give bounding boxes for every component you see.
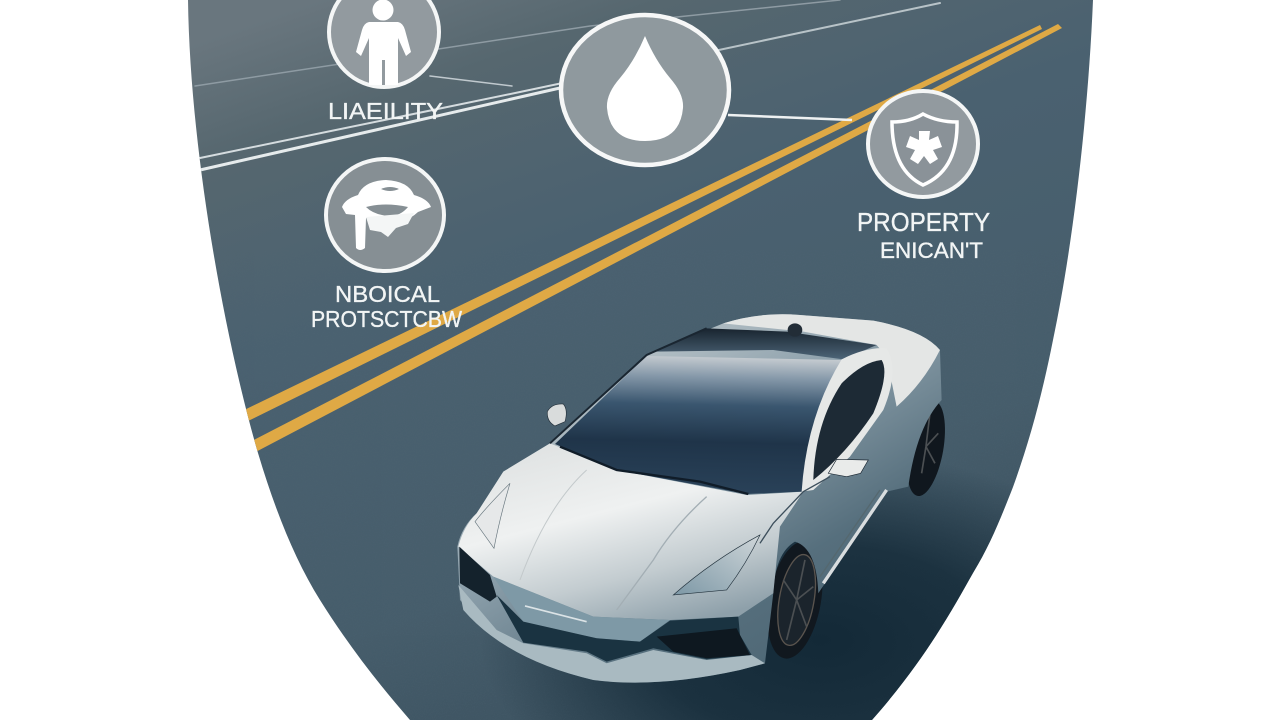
left headlight outline [475, 483, 510, 548]
rear glass [653, 328, 877, 359]
icon: liability person [329, 0, 439, 87]
side mirror right [828, 459, 868, 477]
rear deck highlight [723, 314, 940, 407]
white pillar [802, 348, 893, 492]
rear wheel [900, 398, 951, 499]
infographic: car insurance shield [188, 0, 1093, 720]
car illustration [457, 314, 951, 683]
label: property: PROPERTY [857, 207, 990, 237]
icon: medical protection [326, 159, 444, 271]
left grille [459, 547, 497, 602]
label: property: ENICAN'T [880, 238, 983, 263]
front light bar [525, 606, 587, 622]
icon: property shield [868, 91, 978, 197]
right headlight [673, 535, 760, 595]
road markings: double yellow lines [240, 24, 1062, 455]
windshield [555, 356, 842, 494]
label: liability: LIAEILITY [328, 98, 443, 124]
road markings: white lines [195, 0, 940, 170]
label: medical protection: NBOICAL [335, 281, 440, 307]
front wheel [759, 537, 831, 663]
label: medical protection: PROTSCTCBW [311, 306, 462, 332]
connector line [728, 115, 852, 120]
side mirror left [547, 404, 566, 426]
car lines [520, 328, 887, 610]
panel: shield-shaped road background [180, 0, 1100, 720]
front panel [493, 577, 670, 642]
roof antenna [788, 323, 802, 337]
front lip [458, 585, 765, 683]
front intake [497, 595, 752, 662]
hood [458, 443, 803, 620]
car body [457, 314, 942, 683]
side window [813, 360, 884, 480]
label: medical protection [311, 281, 462, 332]
icon: water drop [561, 15, 729, 165]
label: property [857, 207, 990, 263]
headlamp cluster [657, 628, 750, 658]
car shadow [517, 482, 1008, 720]
